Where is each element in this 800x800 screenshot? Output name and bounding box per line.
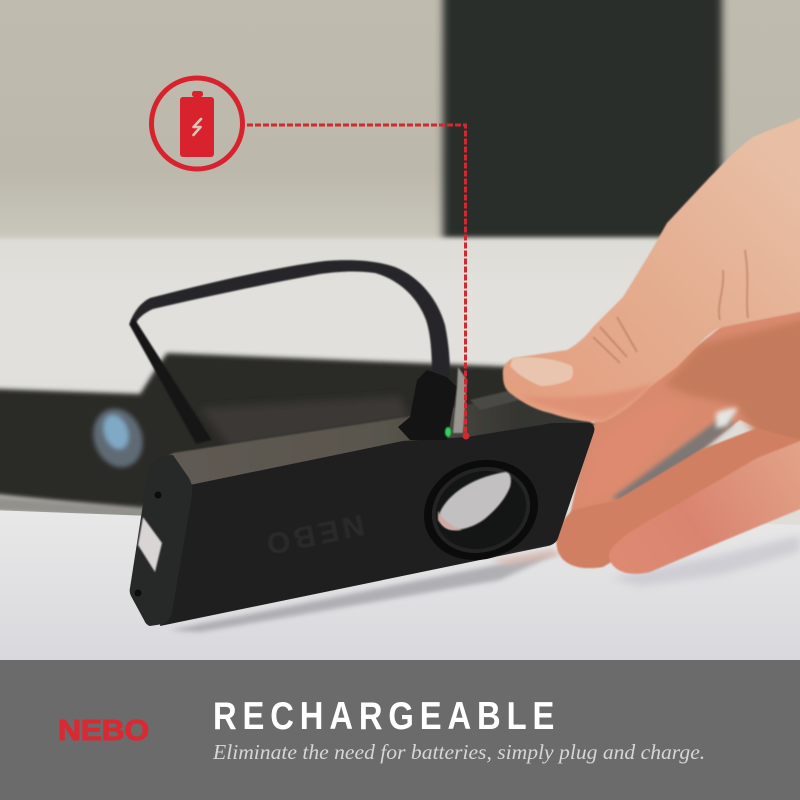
grey port flap [453,367,467,433]
faint logo on device: NEBO [260,508,367,561]
usb plug [398,370,457,440]
lens highlight [438,511,462,530]
subtitle: Eliminate the need for batteries, simply plug and charge. [213,740,705,764]
thumbnail [510,357,573,386]
foreground table surface [0,510,800,660]
end cap screw top [154,492,162,498]
device shadow [170,552,560,632]
charging cable [129,260,450,444]
lens bezel [410,444,552,576]
background wall [0,0,800,245]
arrow: dashed leader line [247,125,470,440]
front face [160,423,594,626]
logo: NEBO: NEBO [58,715,149,747]
green led [445,427,451,437]
gap between fingers [612,412,732,500]
thumb and back of hand [503,108,800,422]
blurred dark laptop [0,353,560,520]
lens reflection [439,472,511,530]
bright gap highlight [716,408,738,428]
middle finger [556,428,800,568]
port buttons [470,388,535,410]
end cap [130,455,192,626]
device [130,367,595,626]
thumb underside shading [520,382,655,420]
background table [0,238,800,548]
palm between thumb and fingers [570,305,800,515]
heading: RECHARGEABLE [213,695,560,738]
footer band [0,660,800,800]
end cap screw bottom [134,590,142,596]
finger shadow [610,535,800,586]
icon: battery in circle [152,78,242,169]
ring finger [609,437,800,574]
knuckle creases [593,250,748,363]
top face [165,396,595,486]
end cap window [138,517,162,572]
skin reflection under device [490,548,560,566]
